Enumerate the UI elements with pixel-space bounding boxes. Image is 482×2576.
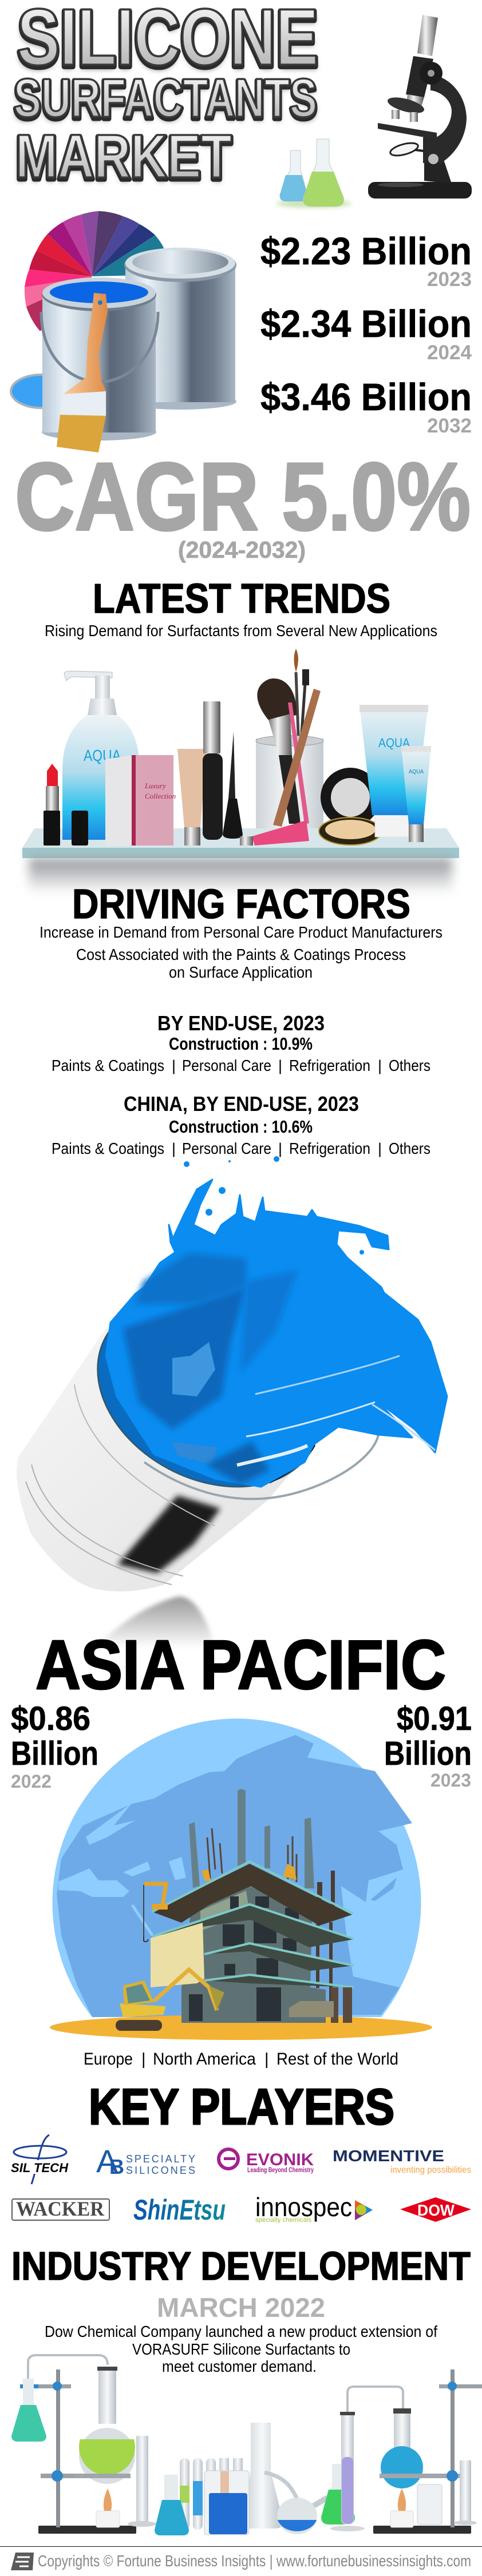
green small flask xyxy=(321,2464,355,2525)
text: development date: MARCH 2022 xyxy=(157,2292,325,2323)
market value 2032: $3.46 Billion xyxy=(260,376,472,419)
logo: Shin-Etsu: ShinEtsu xyxy=(133,2194,226,2226)
segment: China by end-use 2023: Construction : 10.6% xyxy=(169,1117,313,1137)
regional value 2022: $0.86 xyxy=(11,1700,90,1737)
text: other regions: North America xyxy=(153,2050,256,2069)
ground xyxy=(50,2015,432,2040)
pink tube xyxy=(240,820,309,846)
front paint can xyxy=(41,277,158,440)
building xyxy=(151,1789,354,2023)
icon: flasks xyxy=(276,139,351,208)
segment: China by end-use 2023: Paints & Coatings xyxy=(52,1140,164,1157)
crane xyxy=(144,1884,168,1942)
segment: China by end-use 2023: | xyxy=(278,1140,282,1157)
logo: Momentive: inventing possibilities xyxy=(390,2165,471,2175)
connecting tube right xyxy=(347,2387,403,2412)
illustration: tilted bucket with blue paint splash xyxy=(17,1156,447,1648)
right burner xyxy=(390,2488,413,2527)
logo: Wacker: WACKER xyxy=(16,2197,105,2220)
text: other regions: | xyxy=(264,2050,269,2069)
aqua tube large: AQUA xyxy=(378,736,410,750)
icon: colour fan, paint cans and brush xyxy=(11,211,236,453)
text: other regions xyxy=(84,2050,398,2069)
segment: by end-use 2023: Others xyxy=(389,1057,430,1074)
segment: by end-use 2023 xyxy=(52,1011,430,1074)
market value 2024: 2024 xyxy=(427,342,472,364)
brush cup xyxy=(256,649,323,828)
market value 2032: 2032 xyxy=(427,415,472,437)
logo: Evonik xyxy=(219,2149,314,2174)
blue round flask xyxy=(380,2408,469,2488)
logo: Momentive: MOMENTIVE xyxy=(333,2147,444,2165)
illustration: cosmetics on a glass shelf xyxy=(22,649,459,894)
regional value 2022: Billion xyxy=(11,1735,98,1772)
left burner xyxy=(96,2488,120,2527)
segment: by end-use 2023: Construction : 10.9% xyxy=(169,1034,313,1054)
illustration: laboratory glassware xyxy=(11,2355,482,2535)
text: development description: Dow Chemical Company launched a new product extension of xyxy=(45,2323,437,2340)
footer xyxy=(0,2546,482,2570)
market value 2023: 2023 xyxy=(427,268,472,291)
logo: Dow: DOW xyxy=(417,2201,455,2219)
logo: Evonik: EVONIK xyxy=(246,2150,314,2169)
text: development description: VORASURF Silicone Surfactants to xyxy=(132,2340,350,2358)
segment: by end-use 2023: | xyxy=(278,1057,282,1074)
text: driving factor one: Increase in Demand from Personal Care Product Manufacturers xyxy=(39,923,443,941)
pump bottle: AQUA xyxy=(84,747,121,764)
segment: China by end-use 2023 xyxy=(52,1092,430,1157)
logo: Innospec: innospec xyxy=(255,2192,352,2222)
graduated beaker xyxy=(204,2471,249,2535)
segment: China by end-use 2023: | xyxy=(378,1140,382,1157)
heading: latest trends: LATEST TRENDS xyxy=(93,576,390,622)
logo: AB Specialty Silicones: SPECIALTY xyxy=(126,2153,195,2165)
heading: driving factors: DRIVING FACTORS xyxy=(72,882,410,927)
globe xyxy=(53,1718,421,2017)
regional value 2023: 2023 xyxy=(430,1770,471,1791)
aqua tube large xyxy=(359,705,428,837)
gift box: Collection xyxy=(145,792,176,800)
heading: Asia Pacific: ASIA PACIFIC xyxy=(35,1626,446,1704)
segment: by end-use 2023: Refrigeration xyxy=(289,1057,370,1074)
back paint can xyxy=(124,248,236,410)
segment: China by end-use 2023: | xyxy=(172,1140,176,1157)
blue small flask xyxy=(155,2475,189,2535)
mascara xyxy=(203,701,223,840)
title: Silicone Surfactants Market: MARKET xyxy=(15,123,232,192)
title: Silicone Surfactants Market xyxy=(13,0,319,195)
logo: AB Specialty Silicones: B xyxy=(109,2155,124,2178)
colour fan xyxy=(25,211,172,331)
segment: China by end-use 2023: Refrigeration xyxy=(289,1140,370,1157)
regional value 2023 xyxy=(384,1700,472,1791)
beige tube xyxy=(177,749,207,846)
logos: key players xyxy=(11,2135,471,2226)
gift box: Luxury xyxy=(144,781,166,790)
small beaker xyxy=(417,2484,442,2525)
market value 2023: $2.23 Billion xyxy=(260,230,472,273)
bucket body xyxy=(17,1328,312,1591)
gift box xyxy=(105,755,176,846)
connecting tube left xyxy=(28,2355,108,2379)
text: other regions: | xyxy=(141,2050,146,2069)
market value 2032 xyxy=(260,376,472,437)
purple tube xyxy=(330,2412,365,2531)
compact xyxy=(319,768,382,845)
segment: China by end-use 2023: CHINA, BY END-USE, 2023 xyxy=(124,1092,359,1116)
logo: Dow xyxy=(400,2197,471,2222)
teal flask xyxy=(11,2379,46,2442)
logo: Evonik: Leading Beyond Chemistry xyxy=(247,2166,314,2174)
pump bottle xyxy=(62,671,140,840)
text: driving factor two: on Surface Application xyxy=(169,963,313,981)
market value 2023 xyxy=(260,230,472,291)
excavator xyxy=(116,1970,224,2031)
segment: China by end-use 2023: Others xyxy=(389,1140,430,1157)
title: Silicone Surfactants Market: SURFACTANTS xyxy=(13,72,318,133)
paint drops xyxy=(184,1156,364,1255)
shelf xyxy=(22,828,459,894)
segment: by end-use 2023: BY END-USE, 2023 xyxy=(157,1011,325,1035)
regional value 2022: 2022 xyxy=(11,1771,52,1792)
aqua tube small xyxy=(401,746,431,842)
logo: AB Specialty Silicones xyxy=(96,2143,195,2179)
logo: Siltech: SIL TECH xyxy=(11,2161,69,2175)
segment: China by end-use 2023: Personal Care xyxy=(182,1140,271,1157)
regional value 2022 xyxy=(11,1700,98,1792)
right lab stand xyxy=(373,2369,482,2534)
title: Silicone Surfactants Market: MARKET xyxy=(15,121,232,190)
title: Silicone Surfactants Market: SURFACTANTS xyxy=(14,69,317,130)
text: other regions: Rest of the World xyxy=(276,2050,398,2069)
bucket handle xyxy=(144,1435,378,1499)
market value 2024: $2.34 Billion xyxy=(260,303,472,346)
illustration: globe with building under construction xyxy=(50,1718,432,2040)
logo: AB Specialty Silicones: A xyxy=(96,2143,118,2179)
logo: Innospec: specialty chemicals xyxy=(255,2217,311,2224)
paint brush xyxy=(57,293,108,453)
text: driving factor two xyxy=(76,946,406,981)
fine brushes xyxy=(294,649,309,749)
text: development description: meet customer demand. xyxy=(162,2357,317,2375)
icon: microscope xyxy=(368,15,472,199)
green round flask xyxy=(52,2367,135,2484)
eyeliner xyxy=(223,732,243,839)
powder brush xyxy=(257,678,301,824)
segment: by end-use 2023: Personal Care xyxy=(182,1057,271,1074)
segment: by end-use 2023: | xyxy=(172,1057,176,1074)
lipstick xyxy=(44,764,88,846)
text: driving factor two: Cost Associated with the Paints & Coatings Process xyxy=(76,946,406,963)
left lab stand xyxy=(20,2369,136,2534)
title: Silicone Surfactants Market: MARKET xyxy=(14,126,233,195)
text: other regions: Europe xyxy=(84,2050,133,2069)
market value 2024 xyxy=(260,303,472,364)
segment: by end-use 2023: | xyxy=(378,1057,382,1074)
CAGR figure: (2024-2032) xyxy=(178,537,306,563)
regional value 2023: $0.91 xyxy=(397,1700,472,1737)
text: development description xyxy=(45,2323,437,2375)
logo: AB Specialty Silicones: SILICONES xyxy=(126,2165,195,2176)
logo: Fortune Business Insights xyxy=(11,2553,34,2570)
paint puddle xyxy=(11,375,72,408)
text: latest trends description: Rising Demand for Surfactants from Several New Applications xyxy=(45,622,437,640)
splash xyxy=(106,1180,447,1487)
title: Silicone Surfactants Market: SURFACTANTS xyxy=(14,68,317,129)
test tubes xyxy=(180,2458,243,2530)
retort xyxy=(264,2472,327,2534)
segment: by end-use 2023: Paints & Coatings xyxy=(52,1057,164,1074)
measuring cylinder xyxy=(454,2460,477,2525)
bucket reflection xyxy=(101,1597,215,1648)
logo: Momentive xyxy=(333,2147,471,2175)
clear conical flask xyxy=(242,2423,283,2529)
glass cylinder xyxy=(128,2436,156,2527)
heading: key players: KEY PLAYERS xyxy=(89,2078,394,2135)
aqua tube small: AQUA xyxy=(409,769,424,775)
logo: Siltech xyxy=(11,2135,69,2184)
